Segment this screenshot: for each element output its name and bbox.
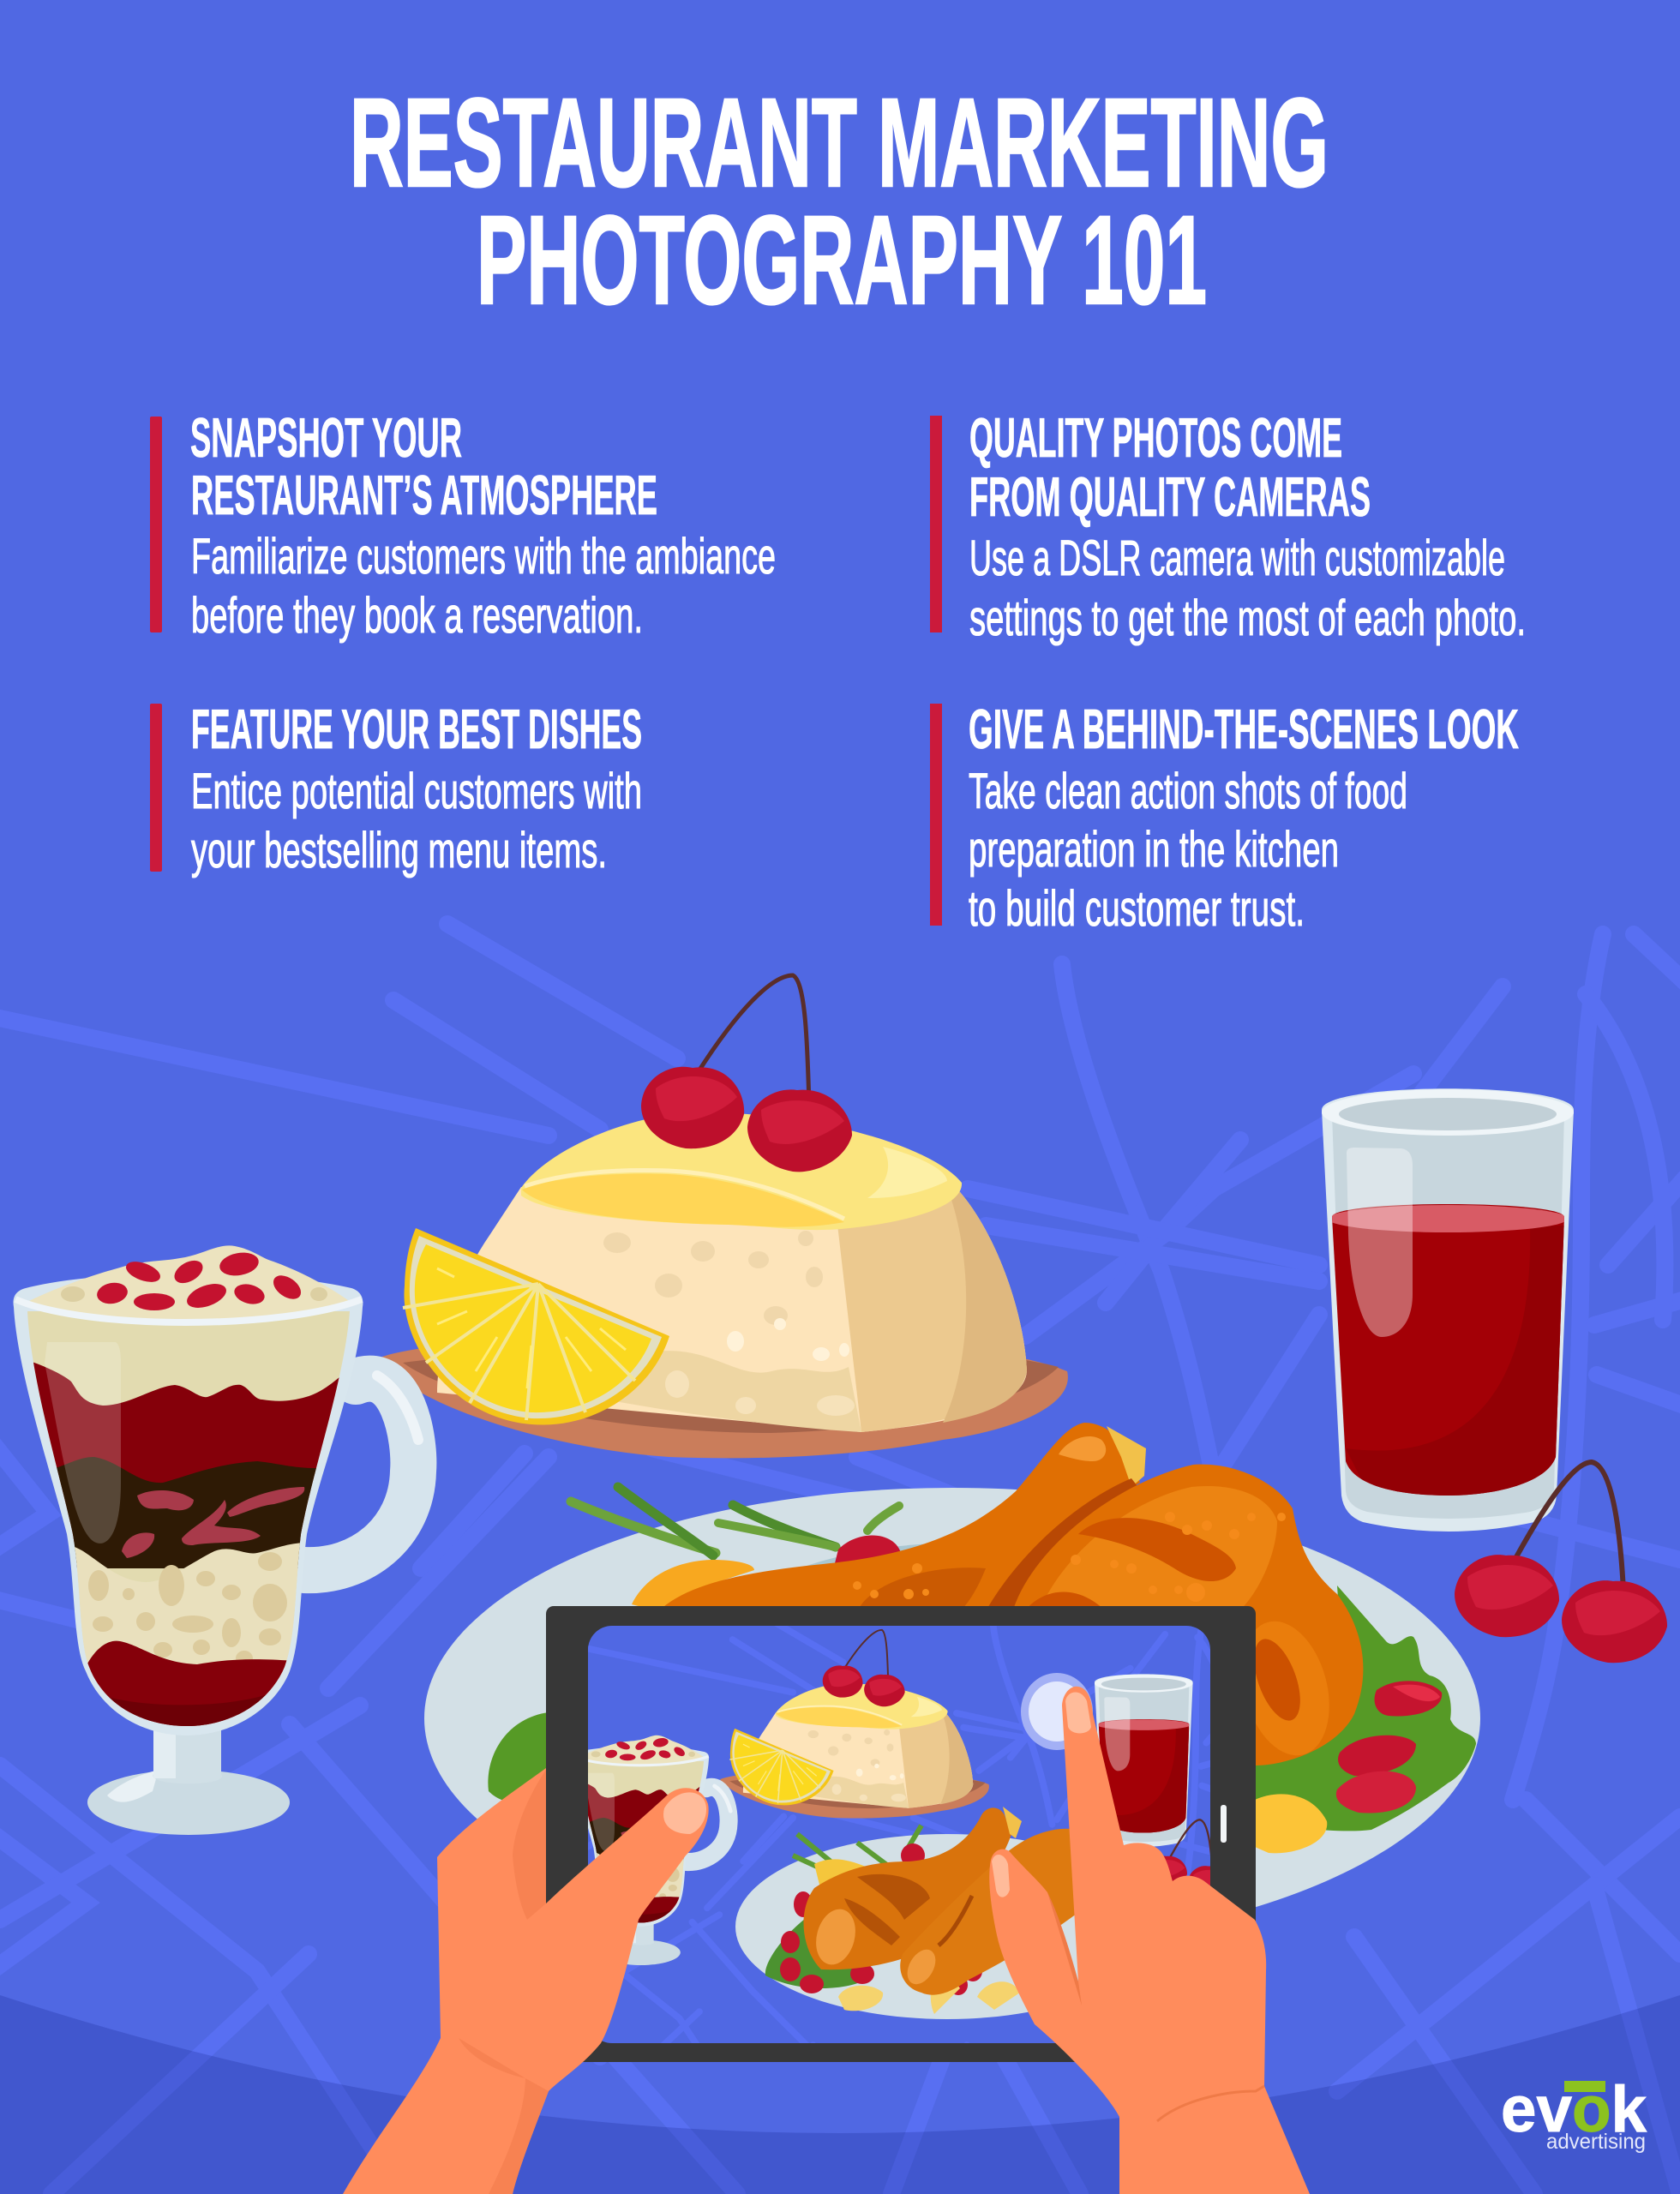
glass bowl	[14, 1274, 363, 1735]
cream topping	[15, 1245, 362, 1322]
heading: RESTAURANT’S ATMOSPHERE	[191, 464, 657, 526]
mini chicken plate	[735, 1807, 1078, 2019]
body text: to build customer trust.	[969, 881, 1305, 937]
body text	[969, 531, 1526, 646]
roast chicken	[658, 1423, 1363, 1765]
tablet device	[546, 1606, 1256, 2105]
illustration: plate with roast chicken	[424, 1423, 1480, 1949]
lemon wedge	[403, 1228, 669, 1425]
title: PHOTOGRAPHY 101	[477, 190, 1207, 331]
tablet body	[546, 1606, 1256, 2062]
tablet screen	[588, 1626, 1210, 2043]
lettuce right	[1256, 1586, 1476, 1831]
body text: Take clean action shots of food	[969, 764, 1407, 819]
body text: before they book a reservation.	[191, 588, 643, 644]
side button	[1221, 1805, 1227, 1843]
juice	[1328, 1200, 1569, 1500]
title	[350, 73, 1329, 331]
body text	[191, 529, 776, 644]
heading: FROM QUALITY CAMERAS	[969, 465, 1371, 528]
illustration: cherry pair	[1455, 1462, 1667, 1663]
logo wordmark: evok	[1501, 2073, 1647, 2146]
body text: preparation in the kitchen	[969, 822, 1339, 878]
glass body	[1322, 1088, 1574, 1532]
pomegranate garnish	[1336, 1681, 1442, 1813]
lettuce left	[488, 1712, 549, 1803]
rosemary sprigs	[571, 1487, 899, 1556]
glass highlight	[1347, 1148, 1413, 1337]
logo: evok advertising	[1501, 2073, 1647, 2154]
body text: your bestselling menu items.	[191, 823, 607, 878]
heading	[969, 406, 1371, 528]
panel: give a behind-the-scenes look	[930, 698, 1519, 937]
potato right	[1255, 1794, 1327, 1853]
logo tagline: advertising	[1546, 2130, 1646, 2154]
illustration: glass of red juice	[1322, 1088, 1574, 1532]
body text: Entice potential customers with	[191, 764, 642, 819]
panel: quality photos come from quality cameras	[930, 406, 1526, 646]
pomegranate seeds	[95, 1250, 305, 1312]
body text	[969, 764, 1407, 937]
lemon icing	[521, 1112, 962, 1230]
heading	[190, 406, 657, 526]
potato	[632, 1560, 754, 1611]
accent bar	[930, 704, 942, 926]
cake plate	[378, 1334, 1068, 1458]
illustration: layered parfait glass	[14, 1245, 418, 1835]
thumbnail	[992, 1855, 1010, 1897]
thumbnail	[663, 1792, 706, 1834]
table edge shadow	[0, 1995, 1680, 2194]
plate shadow	[789, 1543, 960, 1594]
photo preview on screen	[588, 1626, 1210, 2043]
accent bar	[150, 704, 162, 872]
accent bar	[150, 417, 162, 632]
panel: feature your best dishes	[150, 698, 642, 878]
rim	[1322, 1089, 1574, 1136]
heading: QUALITY PHOTOS COME	[969, 406, 1342, 469]
plate	[424, 1488, 1480, 1949]
garnish fruit	[833, 1536, 902, 1571]
right hand pointing at screen	[989, 1687, 1310, 2194]
dessert layers	[17, 1303, 360, 1740]
glass inner	[1332, 1114, 1564, 1519]
cherries on cake	[641, 975, 852, 1172]
index fingernail	[1065, 1692, 1091, 1733]
glass foot and stem	[87, 1727, 290, 1835]
heading: FEATURE YOUR BEST DISHES	[191, 698, 642, 760]
cake body	[437, 1183, 1027, 1432]
panel: snapshot your restaurant's atmosphere	[150, 406, 776, 644]
accent bar	[930, 416, 942, 632]
tap focus indicator	[1021, 1673, 1093, 1750]
left hand with thumb	[343, 1768, 709, 2194]
body text	[191, 764, 642, 878]
glass handle	[304, 1376, 418, 1570]
body text: Familiarize customers with the ambiance	[191, 529, 776, 584]
logo macron	[1564, 2081, 1605, 2092]
illustration: cake with lemon and cherries	[378, 975, 1068, 1458]
heading: SNAPSHOT YOUR	[190, 406, 462, 469]
